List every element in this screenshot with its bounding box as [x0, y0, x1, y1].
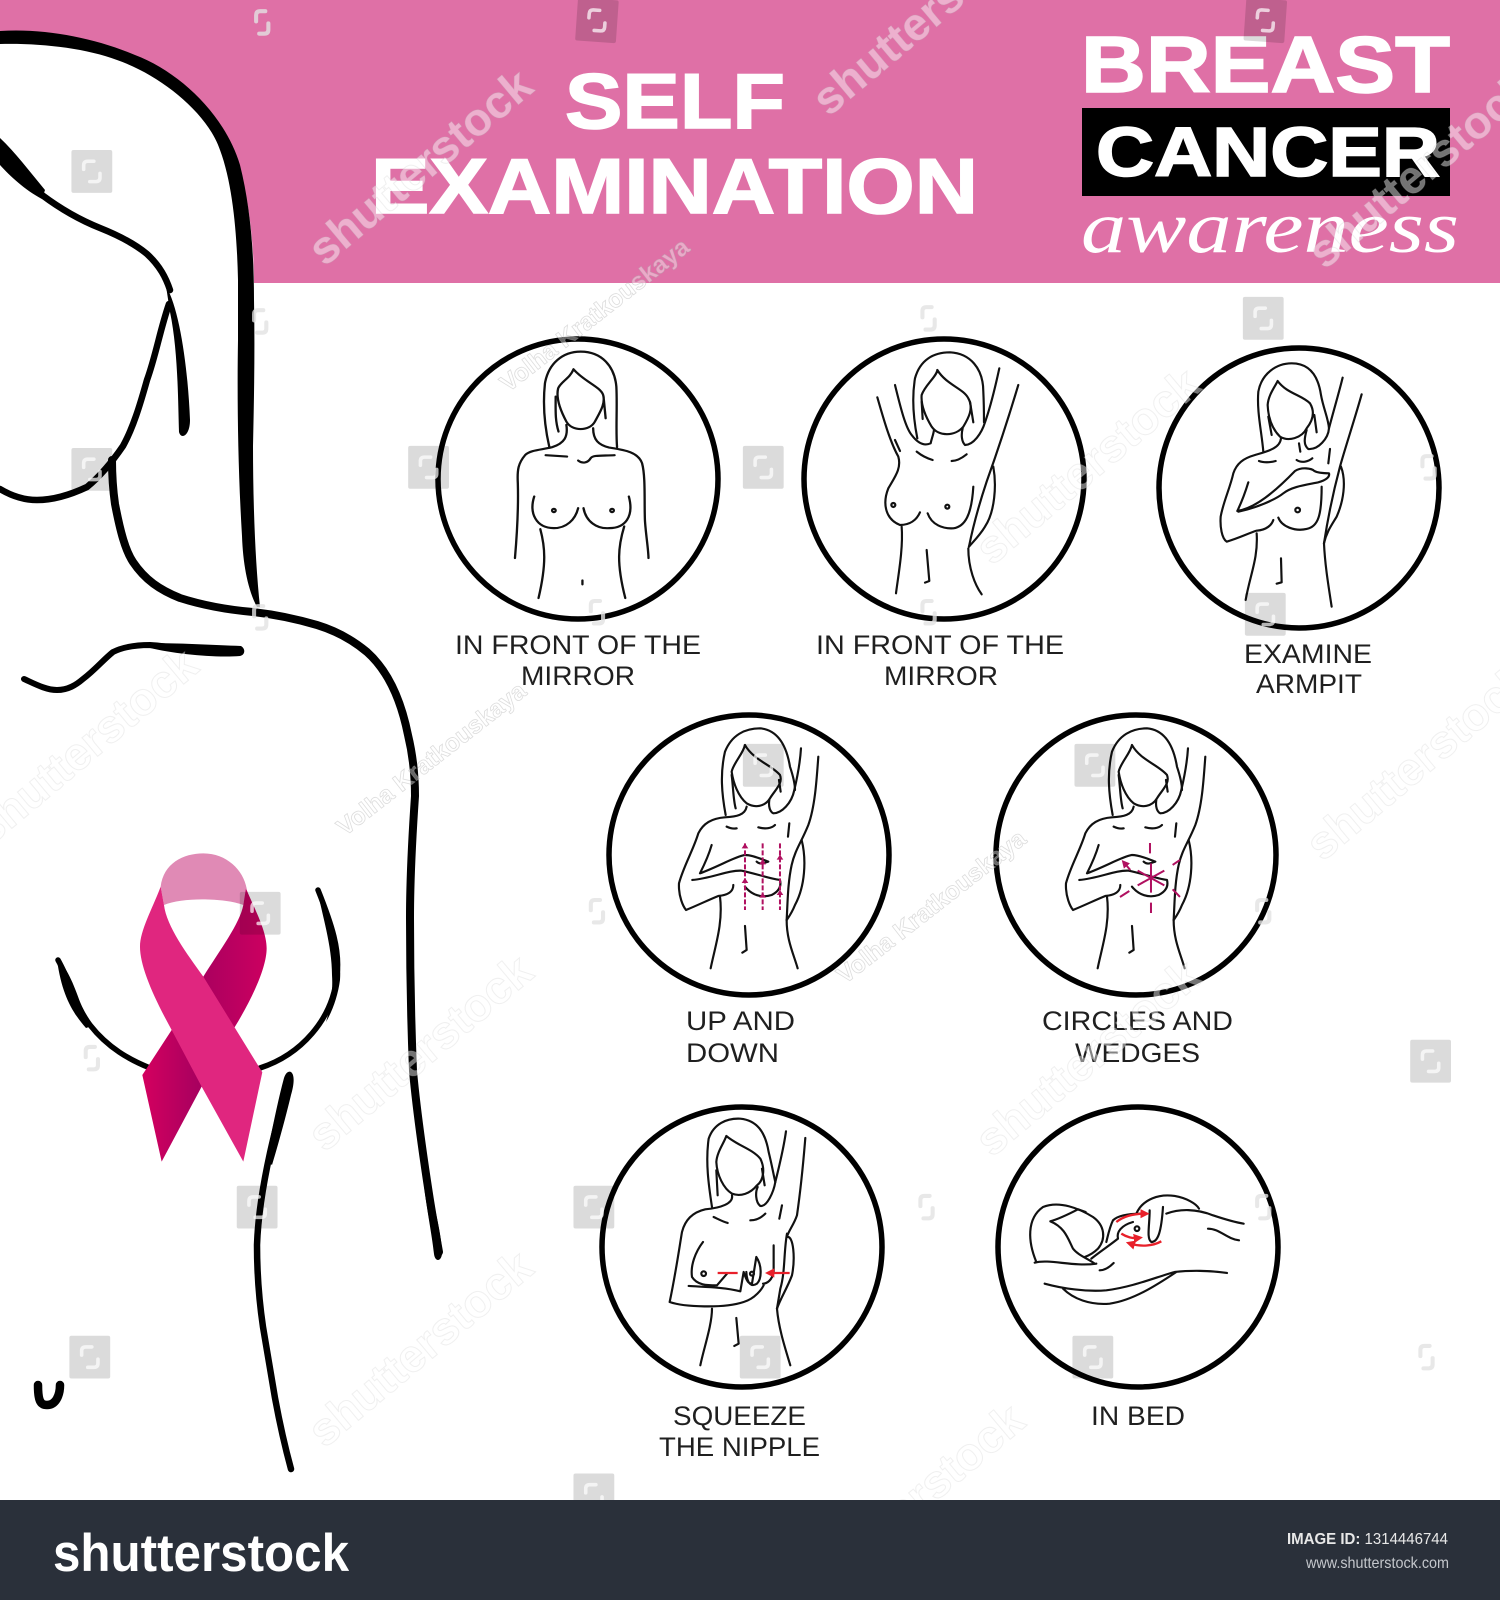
step 7: in bed — [998, 1107, 1278, 1431]
caption: WEDGES — [1075, 1038, 1200, 1068]
step 6: squeeze the nipple — [602, 1107, 882, 1462]
figure arms raised — [877, 352, 1018, 594]
caption: ARMPIT — [1256, 669, 1362, 699]
caption: THE NIPPLE — [659, 1432, 820, 1462]
ribbon front strand — [140, 887, 262, 1162]
figure hand to armpit — [1221, 363, 1362, 607]
logo: breast cancer awareness: awareness — [1081, 187, 1459, 269]
caption: CIRCLES AND — [1042, 1006, 1233, 1036]
squeeze arrows — [718, 1269, 790, 1276]
stock watermarks: Volha Kratkouskaya — [332, 677, 532, 841]
figure squeezing — [670, 1119, 805, 1365]
large woman outline — [0, 30, 442, 1469]
heading: self examination — [371, 57, 978, 230]
heading: self examination: EXAMINATION — [371, 142, 978, 230]
stock watermarks: shutterstock — [297, 943, 542, 1161]
stock watermarks: Volha Kratkouskaya — [495, 233, 695, 398]
footer logo: shutterstock — [53, 1524, 349, 1583]
pink ribbon — [140, 853, 267, 1162]
logo: breast cancer awareness: CANCER — [1096, 113, 1440, 191]
figure with vertical pattern — [679, 728, 818, 968]
caption: MIRROR — [521, 661, 635, 691]
vertical pattern arrows — [742, 843, 783, 910]
step 3: examine armpit — [1159, 348, 1439, 699]
figure with wedge pattern — [1066, 728, 1205, 968]
caption: MIRROR — [884, 661, 998, 691]
footer bar — [0, 1500, 1500, 1600]
caption: IN FRONT OF THE — [455, 630, 701, 660]
stock watermarks: shutterstock — [297, 58, 542, 275]
caption: IN BED — [1091, 1401, 1185, 1431]
caption: IN FRONT OF THE — [816, 630, 1064, 660]
figure lying down — [1030, 1195, 1244, 1304]
header banner — [0, 0, 1500, 283]
stock watermarks: shutterstock — [965, 949, 1210, 1166]
caption — [455, 630, 701, 691]
caption — [686, 1006, 795, 1068]
step 1: in front of the mirror — [438, 339, 718, 691]
image id: IMAGE ID: 1314446744 — [1287, 1531, 1448, 1548]
heading: self examination: SELF — [565, 57, 785, 145]
website: www.shutterstock.com — [1305, 1555, 1449, 1572]
caption: DOWN — [686, 1038, 779, 1068]
step 5: circles and wedges — [996, 715, 1276, 1068]
logo: breast cancer awareness: BREAST — [1081, 20, 1450, 109]
caption: SQUEEZE — [673, 1401, 806, 1431]
step 4: up and down — [609, 715, 889, 1068]
ribbon loop top — [161, 853, 247, 905]
caption: EXAMINE — [1244, 639, 1372, 669]
stock watermarks: shutterstock — [297, 1239, 542, 1457]
ribbon back strand — [142, 888, 267, 1162]
caption — [1244, 639, 1372, 699]
figure arms down — [515, 352, 648, 598]
caption: UP AND — [686, 1006, 795, 1036]
stock watermarks: shutterstock — [965, 357, 1210, 574]
step 2: in front of the mirror, arms raised — [804, 339, 1084, 691]
stock watermarks: Volha Kratkouskaya — [832, 825, 1032, 989]
wedge arrows — [1120, 843, 1180, 913]
caption — [816, 630, 1064, 691]
caption — [659, 1401, 820, 1462]
logo: breast cancer awareness — [1081, 20, 1459, 269]
massage arrows — [1116, 1214, 1161, 1246]
caption — [1042, 1006, 1233, 1068]
